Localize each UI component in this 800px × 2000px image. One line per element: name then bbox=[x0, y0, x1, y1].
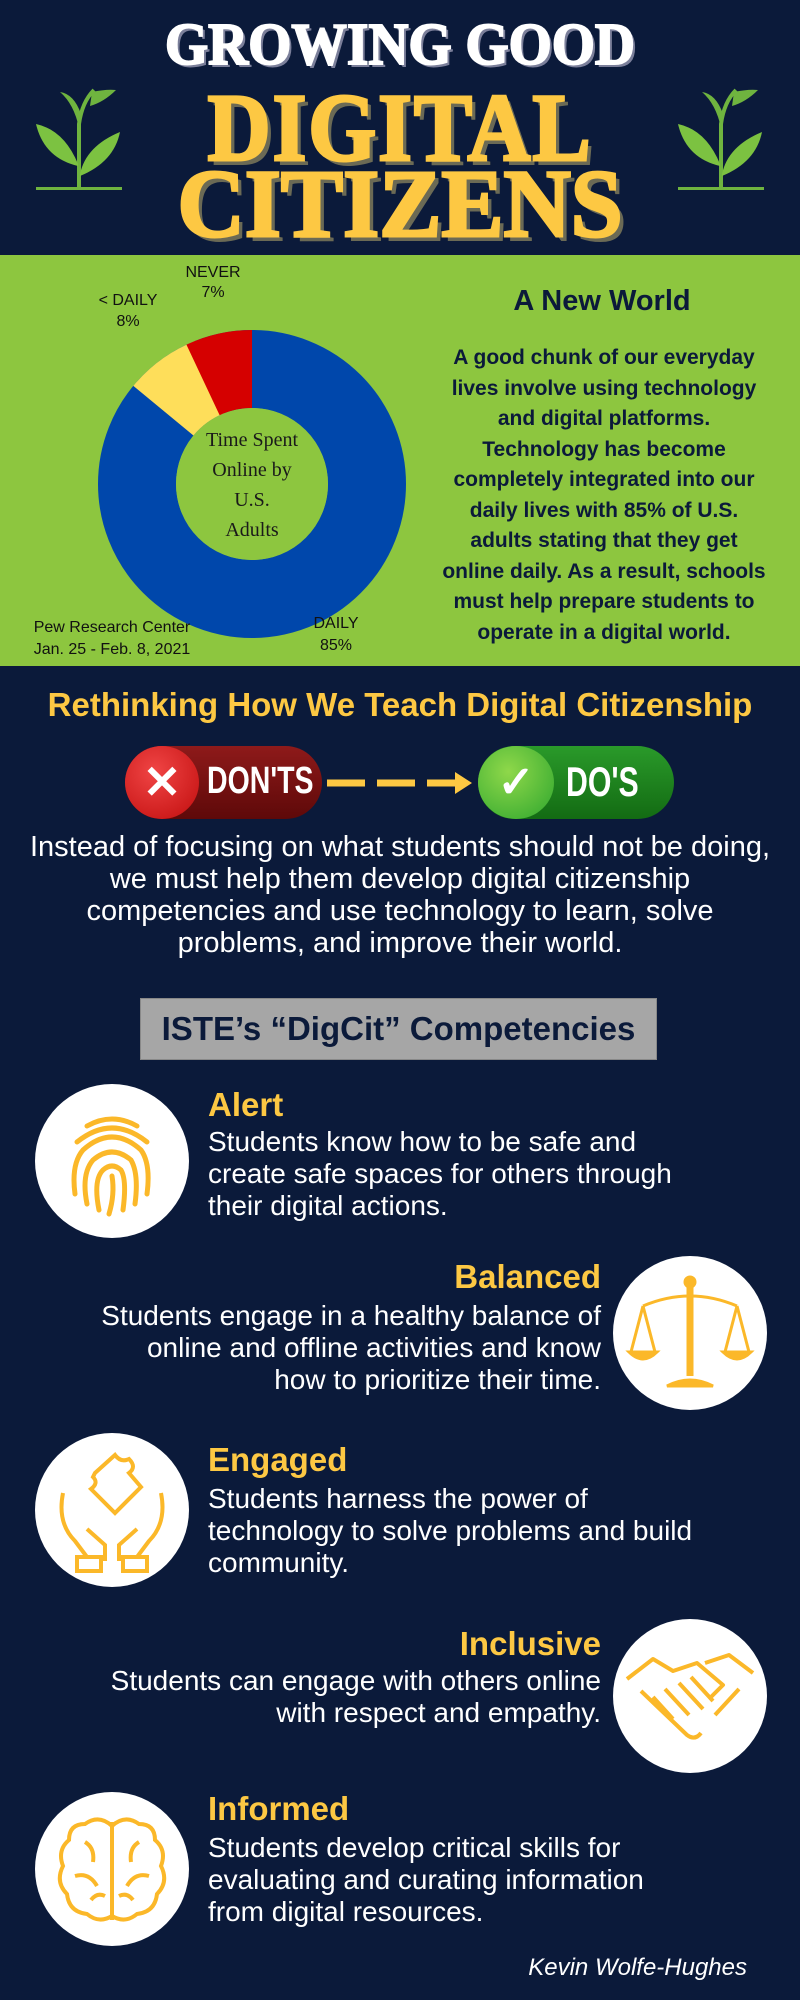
panel: a new world bbox=[0, 255, 800, 666]
heading: engaged: Engaged bbox=[208, 1441, 347, 1478]
item: balanced bbox=[101, 1256, 767, 1410]
pill: don'ts: DON'TS bbox=[207, 760, 314, 802]
text: inclusive bbox=[111, 1665, 601, 1728]
text: alert: Students know how to be safe and bbox=[208, 1126, 636, 1157]
heading: informed: Informed bbox=[208, 1790, 349, 1827]
text: inclusive: with respect and empathy. bbox=[276, 1697, 601, 1728]
icon: right sprout bbox=[678, 88, 764, 190]
text: new world paragraph: online daily. As a result, schools bbox=[442, 560, 766, 582]
label: less than daily: 8% bbox=[116, 313, 140, 330]
label: daily: DAILY bbox=[313, 615, 359, 632]
arrow: dashed bbox=[327, 772, 472, 794]
text: new world paragraph: and digital platforms. bbox=[498, 407, 710, 430]
icon: x mark bbox=[125, 746, 199, 819]
icon: check mark bbox=[478, 746, 554, 819]
text: new world paragraph bbox=[442, 346, 766, 644]
label: daily: 85% bbox=[320, 637, 352, 654]
icon: scales bbox=[613, 1256, 767, 1410]
text: new world paragraph: completely integrated into our bbox=[453, 468, 755, 491]
author credit: Kevin Wolfe-Hughes bbox=[528, 1954, 747, 1981]
text: new world paragraph: Technology has become bbox=[482, 438, 726, 460]
heading: rethinking: Rethinking How We Teach Digital Citizenship bbox=[48, 686, 752, 723]
text: instead paragraph: we must help them develop digital citizenship bbox=[110, 863, 690, 895]
item: informed bbox=[35, 1790, 644, 1946]
header band bbox=[0, 0, 800, 255]
text: engaged bbox=[208, 1483, 692, 1578]
item: engaged bbox=[35, 1433, 692, 1587]
donut chart: Adults bbox=[225, 519, 279, 541]
icon: handshake bbox=[613, 1619, 767, 1773]
text: balanced: online and offline activities and know bbox=[147, 1332, 601, 1363]
text: instead paragraph: Instead of focusing on what students should not be doing, bbox=[30, 831, 770, 863]
source note: Pew Research Center bbox=[34, 619, 190, 636]
donut chart: U.S. bbox=[234, 489, 270, 511]
icon: brain bbox=[35, 1792, 189, 1946]
text: informed bbox=[208, 1832, 644, 1927]
label: less than daily: < DAILY bbox=[99, 292, 157, 309]
text: instead paragraph: problems, and improve their world. bbox=[178, 927, 622, 959]
heading: alert: Alert bbox=[208, 1086, 283, 1123]
text: instead paragraph bbox=[30, 831, 770, 959]
donut chart: Online by bbox=[212, 459, 292, 481]
icon: x mark: ✕ bbox=[143, 756, 181, 808]
label: never: 7% bbox=[201, 284, 225, 301]
text: new world paragraph: operate in a digital world. bbox=[477, 620, 731, 644]
text: alert: create safe spaces for others through bbox=[208, 1158, 672, 1189]
text: instead paragraph: competencies and use technology to learn, solve bbox=[86, 895, 714, 927]
text: alert bbox=[208, 1126, 672, 1221]
heading: inclusive: Inclusive bbox=[460, 1625, 601, 1662]
text: informed: evaluating and curating information bbox=[208, 1864, 644, 1895]
text: balanced: Students engage in a healthy balance of bbox=[101, 1300, 601, 1331]
title: digital: DIGITAL bbox=[208, 74, 592, 181]
title: growing good: GROWING GOOD bbox=[165, 11, 635, 77]
icon: hands with puzzle bbox=[35, 1433, 189, 1587]
icon: fingerprint bbox=[35, 1084, 189, 1238]
item: alert bbox=[35, 1084, 672, 1238]
text: alert: their digital actions. bbox=[208, 1190, 448, 1221]
text: engaged: technology to solve problems and build bbox=[208, 1515, 692, 1546]
text: new world paragraph: A good chunk of our everyday bbox=[453, 346, 755, 369]
source note: Jan. 25 - Feb. 8, 2021 bbox=[34, 641, 190, 658]
heading box: ISTE competencies bbox=[140, 998, 657, 1060]
label: never: NEVER bbox=[185, 264, 241, 281]
text: new world paragraph: adults stating that they get bbox=[470, 529, 738, 552]
heading box: ISTE competencies: ISTE’s “DigCit” Competencies bbox=[162, 1010, 635, 1047]
text: new world paragraph: lives involve using technology bbox=[452, 376, 756, 400]
pill: don'ts bbox=[125, 746, 322, 819]
icon: check mark: ✓ bbox=[498, 758, 534, 807]
title: citizens: CITIZENS bbox=[177, 150, 623, 257]
label: never bbox=[185, 264, 241, 301]
text: balanced: how to prioritize their time. bbox=[274, 1364, 601, 1395]
pill: do's: DO'S bbox=[566, 758, 639, 805]
icon: left sprout bbox=[36, 88, 122, 190]
text: new world paragraph: daily lives with 85% of U.S. bbox=[470, 498, 738, 522]
text: balanced bbox=[101, 1300, 602, 1395]
text: inclusive: Students can engage with others online bbox=[111, 1665, 601, 1696]
label: daily bbox=[313, 615, 359, 654]
label: less than daily bbox=[99, 292, 157, 330]
item: inclusive bbox=[111, 1619, 767, 1773]
heading: balanced: Balanced bbox=[454, 1258, 601, 1295]
text: informed: from digital resources. bbox=[208, 1896, 483, 1927]
text: engaged: Students harness the power of bbox=[208, 1483, 588, 1514]
heading: a new world: A New World bbox=[513, 285, 691, 317]
donut chart bbox=[98, 330, 406, 638]
source note bbox=[34, 619, 190, 658]
text: engaged: community. bbox=[208, 1547, 349, 1578]
text: new world paragraph: must help prepare students to bbox=[453, 590, 755, 613]
pill: do's bbox=[478, 746, 674, 819]
text: informed: Students develop critical skills for bbox=[208, 1832, 620, 1863]
donut chart: Time Spent bbox=[206, 429, 298, 451]
